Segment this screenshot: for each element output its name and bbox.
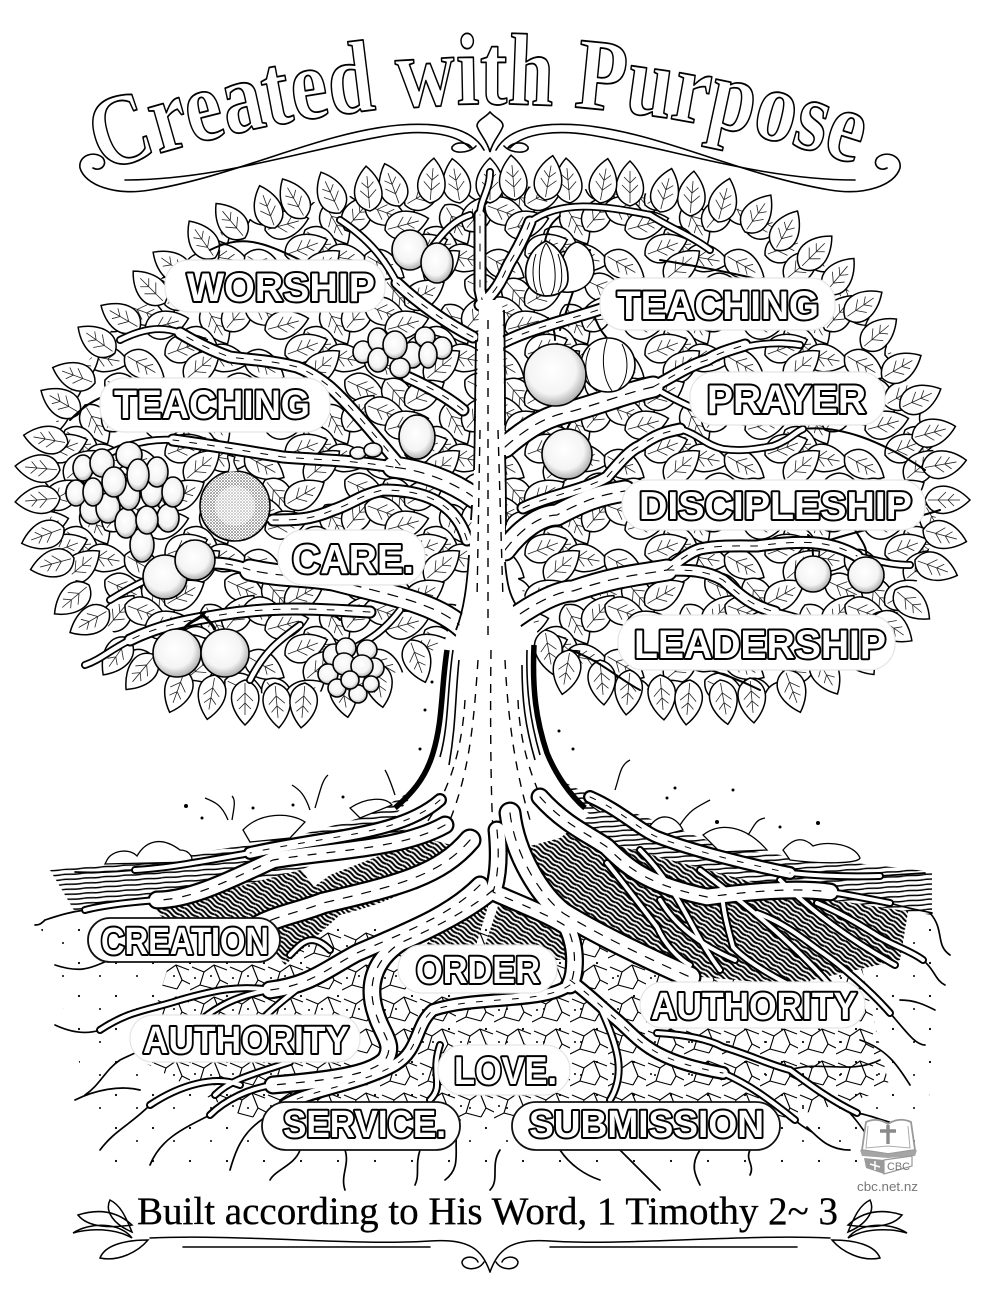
fruit: orange xyxy=(200,455,270,541)
label: PRAYER xyxy=(690,372,885,425)
fruit: top left pair xyxy=(392,230,453,283)
label: LEADERSHIP: LEADERSHIP xyxy=(634,623,886,667)
label: CARE.: CARE. xyxy=(292,536,414,582)
title flourish xyxy=(80,112,900,192)
fruit: upper grape cluster xyxy=(353,327,452,378)
roots xyxy=(35,797,950,1190)
label: SERVICE.: SERVICE. xyxy=(283,1104,446,1146)
label: ORDER: ORDER xyxy=(416,950,540,992)
canopy: leaf mass xyxy=(14,153,970,729)
title xyxy=(92,32,864,165)
label: WORSHIP: WORSHIP xyxy=(187,266,375,310)
tree limbs and branches xyxy=(70,172,940,690)
label: AUTHORITY left: AUTHORITY xyxy=(143,1020,349,1062)
fruit: small berry cluster xyxy=(318,638,384,703)
fruit: figs top xyxy=(526,241,594,296)
label: PRAYER: PRAYER xyxy=(707,378,866,422)
trunk xyxy=(395,300,590,850)
fruit: apples left xyxy=(143,540,215,599)
label: AUTHORITY right: AUTHORITY xyxy=(651,986,857,1028)
fruit: apple under pair xyxy=(542,429,592,479)
footer flourish xyxy=(73,1200,907,1272)
ground: cracked earth between the roots xyxy=(140,930,890,1120)
label: CREATION: CREATION xyxy=(101,921,269,963)
label: SUBMISSION: SUBMISSION xyxy=(529,1104,764,1146)
fruit: apples lower left xyxy=(153,612,249,677)
scattered dots above ground xyxy=(184,680,820,828)
label: DISCIPLESHIP: DISCIPLESHIP xyxy=(639,485,912,528)
logo: CBC book: cbc.net.nz xyxy=(857,1179,918,1194)
label: TEACHING right: TEACHING xyxy=(617,284,819,328)
footer text: Built according to His Word, 1 Timothy 2~ 3 xyxy=(137,1190,838,1233)
fruit: large grape bunch xyxy=(66,442,184,562)
fruit: oval mid xyxy=(350,415,435,459)
label: LOVE.: LOVE. xyxy=(454,1050,557,1093)
logo: CBC book xyxy=(857,1120,918,1194)
logo: CBC book: CBC xyxy=(887,1161,910,1173)
fruit: right pair xyxy=(795,556,884,593)
stones and grass on the ground line xyxy=(105,760,860,864)
scattered soil dots xyxy=(40,925,950,1170)
fruit: pair upper right xyxy=(524,338,635,406)
label: TEACHING left: TEACHING xyxy=(114,383,310,427)
title: Created with Purpose xyxy=(92,32,864,165)
ground: dark hatching between roots xyxy=(50,770,932,985)
